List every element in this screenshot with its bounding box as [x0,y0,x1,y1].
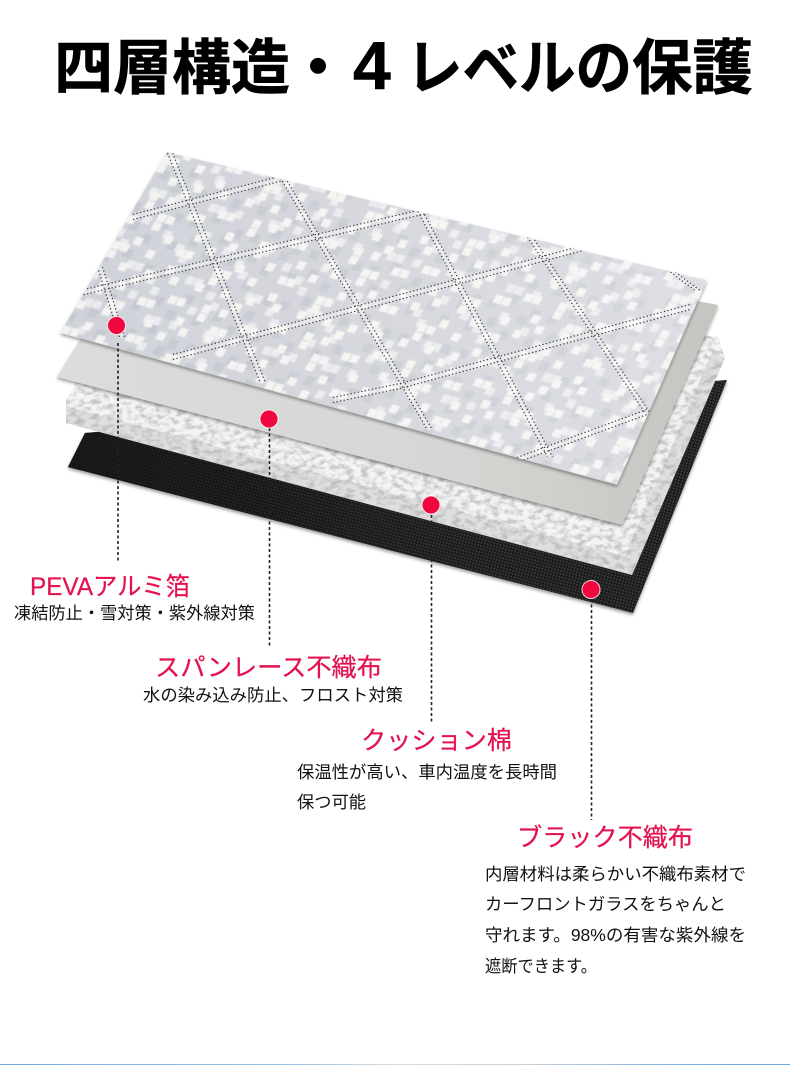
marker dot: cushion [422,496,440,514]
label: spunlace description: 水の染み込み防止、フロスト対策 [143,685,403,705]
label: cushion description [297,762,557,812]
title: 四層構造 [54,35,290,102]
leader line: black non-woven [590,599,592,820]
label: black non-woven heading: ブラック不織布 [517,824,693,852]
marker dot: black non-woven [582,580,600,598]
marker dot: PEVA [108,316,126,334]
label: cushion heading: クッション棉 [361,727,512,755]
marker dot: spunlace [260,410,278,428]
title: レベルの [406,35,632,102]
label: spunlace heading: スパンレース不織布 [155,654,382,682]
layer 1: PEVA aluminium foil sheet [60,152,707,485]
leader line: spunlace [268,428,270,648]
leader line: cushion [430,515,432,722]
leader line: PEVA [117,343,119,561]
layered material illustration [57,152,727,613]
layer 2: spunlace non-woven sheet [57,200,718,525]
title: 保護 [632,35,753,102]
layer 4: black non-woven sheet [68,380,727,613]
quilted stitching [80,153,700,462]
label: black non-woven description: カーフロントガラスをちゃんと [485,894,726,914]
title: ・ [288,35,348,102]
layer 3: cushion cotton [66,260,725,575]
label: PEVA description: 凍結防止・雪対策・紫外線対策 [14,603,255,623]
label: black non-woven description [485,864,746,976]
title: 4 [353,28,391,104]
label: black non-woven description: 内層材料は柔らかい不織布素材で [485,864,746,884]
label: PEVA heading: PEVAアルミ箔 [30,573,190,601]
label: cushion description: 保温性が高い、車内温度を長時間 [297,762,557,782]
label: cushion description: 保つ可能 [297,792,366,812]
label: black non-woven description: 守れます。98%の有害な紫外線を [485,925,746,945]
label: black non-woven description: 遮断できます。 [485,956,597,976]
